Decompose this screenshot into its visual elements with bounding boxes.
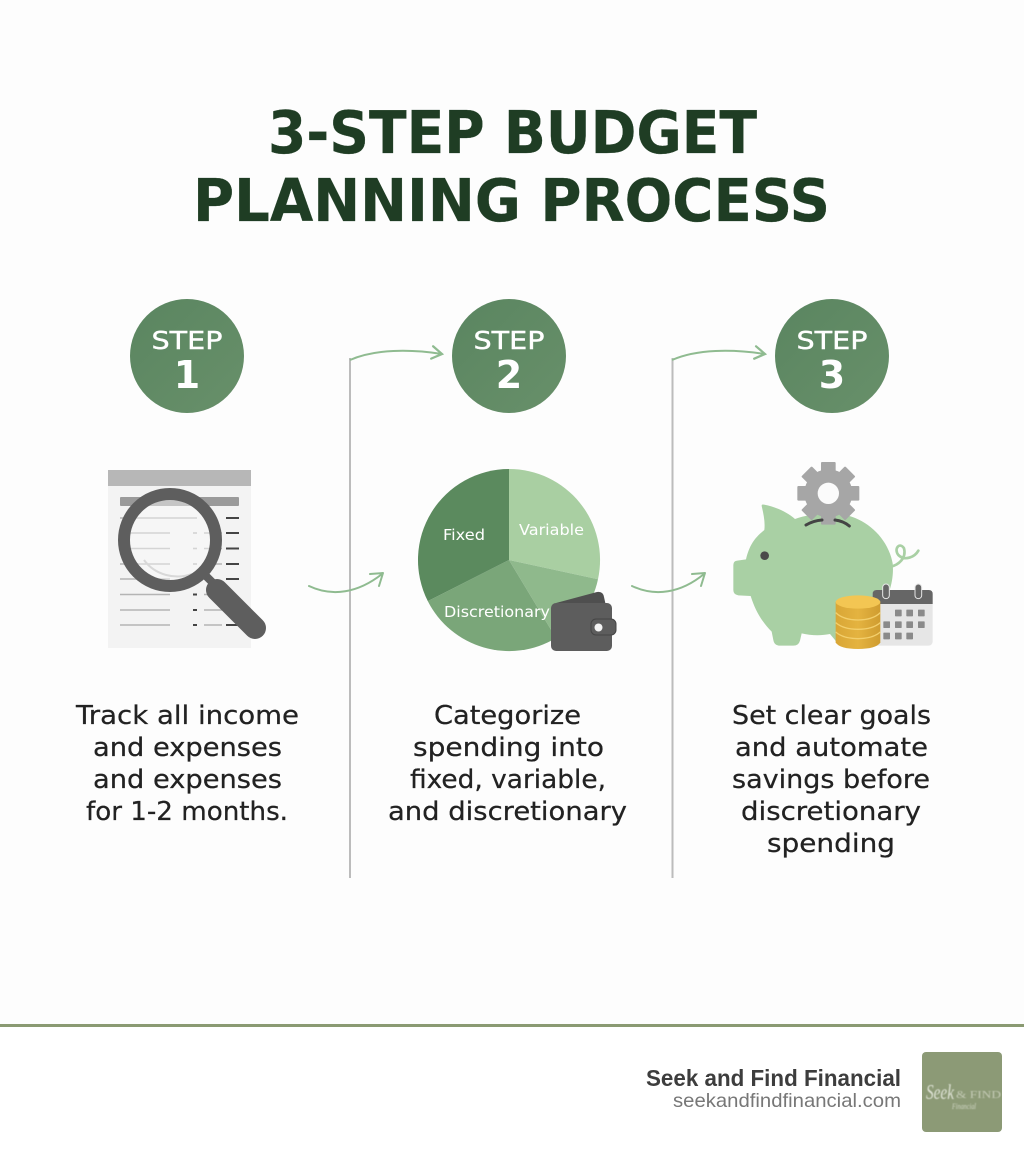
title: 3-STEP BUDGET bbox=[268, 98, 757, 167]
footer: logo: Seek bbox=[926, 1080, 954, 1104]
text: step 3 description: discretionary bbox=[741, 797, 921, 827]
text: step 2 description: and discretionary bbox=[388, 797, 627, 827]
icon: calendar bbox=[873, 584, 933, 646]
text: step 3 description: savings before bbox=[732, 765, 930, 795]
icon: pig body bbox=[733, 504, 893, 646]
panel: step 3 bbox=[732, 299, 933, 859]
text: step 2 description: Categorize bbox=[434, 701, 581, 731]
text: step 3 description: and automate bbox=[735, 733, 928, 763]
chart: spending pie with wallet: Variable bbox=[519, 521, 584, 539]
icon: wallet bbox=[551, 592, 616, 651]
badge: step 1: 1 bbox=[174, 353, 200, 397]
text: step 2 description: fixed, variable, bbox=[410, 765, 606, 795]
text: step 1 description: for 1-2 months. bbox=[86, 797, 288, 827]
icon: coin stack bbox=[836, 595, 880, 649]
icon: pig tail bbox=[891, 546, 918, 567]
title: PLANNING PROCESS bbox=[193, 166, 830, 235]
footer: website: seekandfindfinancial.com bbox=[673, 1090, 901, 1112]
badge: step 3: STEP bbox=[796, 326, 868, 355]
text: step 3 description bbox=[732, 701, 931, 859]
footer: logo: Financial bbox=[951, 1102, 977, 1111]
text: step 2 description: spending into bbox=[413, 733, 604, 763]
footer: company name: Seek and Find Financial bbox=[646, 1065, 901, 1091]
chart: spending pie with wallet: Discretionary bbox=[444, 603, 550, 621]
text: step 1 description: Track all income bbox=[75, 701, 299, 731]
chart: spending pie with wallet: Fixed bbox=[443, 526, 485, 544]
panel: step 1 bbox=[75, 299, 383, 827]
title bbox=[193, 98, 830, 235]
footer: logo bbox=[922, 1052, 1002, 1132]
badge: step 2: 2 bbox=[496, 353, 522, 397]
icon: coin slot bbox=[806, 520, 849, 526]
text: step 2 description bbox=[388, 701, 627, 827]
footer bbox=[0, 1024, 1024, 1154]
icon: piggy bank with gear, coins and calendar bbox=[733, 462, 933, 649]
chart: spending pie with wallet bbox=[418, 469, 616, 651]
connector: step 2 to step 3 bbox=[672, 351, 765, 878]
badge: step 3 bbox=[775, 299, 889, 413]
badge: step 2: STEP bbox=[474, 326, 544, 355]
text: step 3 description: spending bbox=[767, 829, 895, 859]
arrow: curved step 1 to pie bbox=[309, 573, 383, 592]
connector: step 1 to step 2 bbox=[350, 351, 442, 878]
arrow: curved pie to piggy bank bbox=[632, 573, 705, 592]
text: step 1 description: and expenses bbox=[93, 765, 282, 795]
footer: logo: & FIND bbox=[956, 1090, 1001, 1101]
badge: step 1 bbox=[130, 299, 244, 413]
badge: step 3: 3 bbox=[819, 353, 845, 397]
text: step 3 description: Set clear goals bbox=[732, 701, 931, 731]
badge: step 1: STEP bbox=[152, 326, 222, 355]
badge: step 2 bbox=[452, 299, 566, 413]
icon: ledger with magnifying glass bbox=[108, 470, 255, 648]
icon: gear bbox=[797, 462, 859, 525]
text: step 1 description: and expenses bbox=[93, 733, 282, 763]
text: step 1 description bbox=[75, 701, 299, 827]
panel: step 2 bbox=[388, 299, 705, 827]
icon: pig eye bbox=[760, 551, 769, 560]
